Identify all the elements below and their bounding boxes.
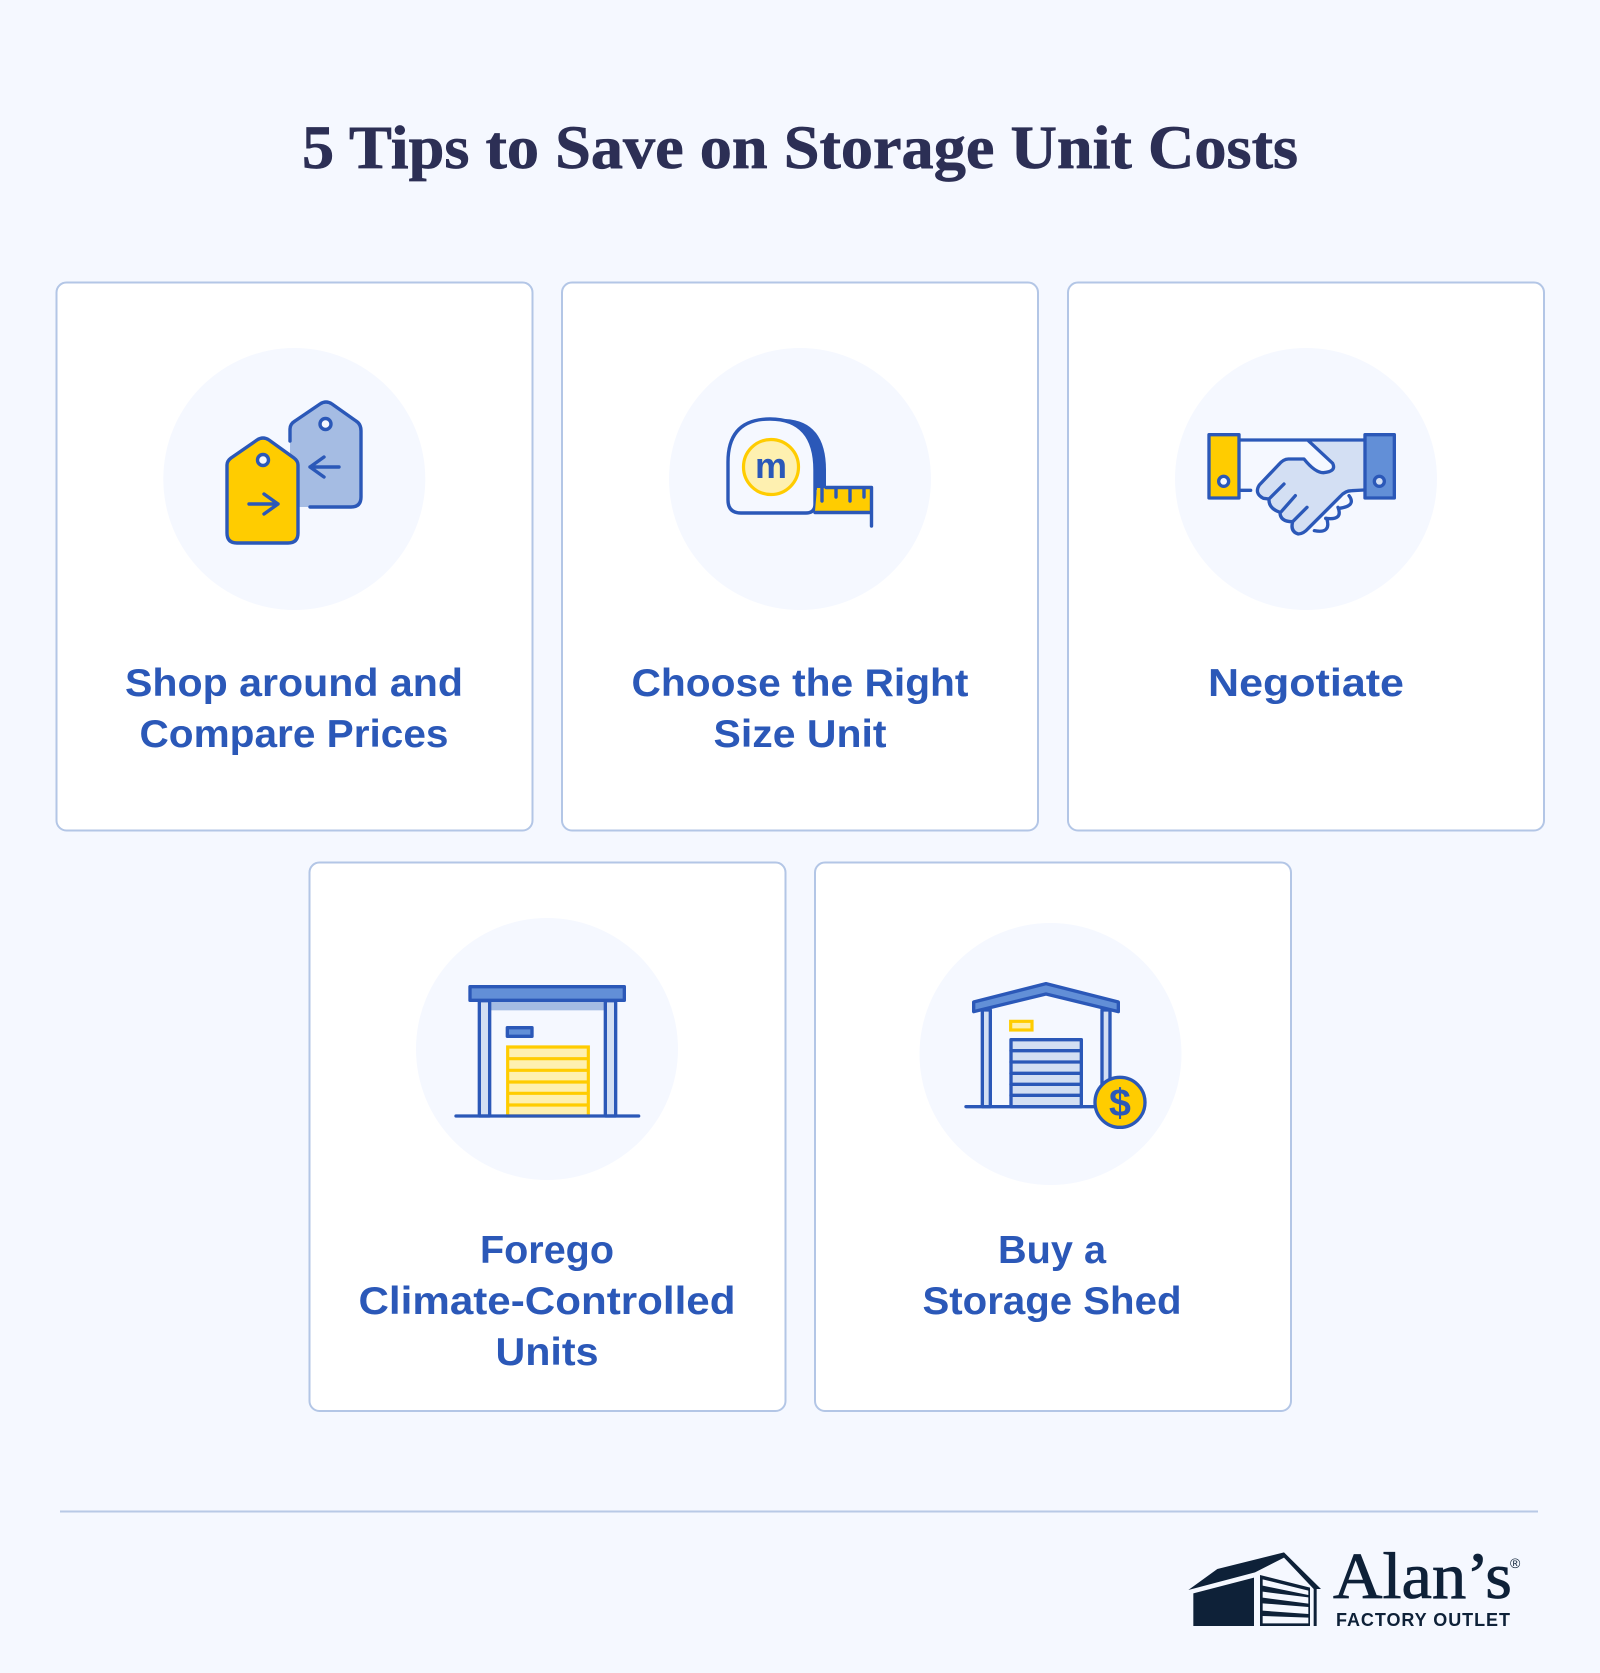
icon: storage shed with coin: $ xyxy=(1109,1081,1131,1125)
logo: Alan's Factory Outlet xyxy=(1188,1540,1521,1630)
heading: forego climate control: Units xyxy=(496,1331,598,1374)
icon: logo building xyxy=(1188,1552,1321,1626)
heading: right size xyxy=(632,662,969,756)
panel: right size xyxy=(562,282,1038,830)
icon: tape measure xyxy=(728,419,872,526)
heading: right size: Choose the Right xyxy=(632,662,969,705)
heading: shop around: Compare Prices xyxy=(140,713,448,756)
panel: shop around xyxy=(56,282,532,830)
icon: open storage unit xyxy=(456,987,639,1116)
registered mark: ® xyxy=(1510,1555,1521,1571)
wordmark: Alan’s xyxy=(1333,1540,1512,1613)
heading: buy a shed: Buy a xyxy=(998,1229,1106,1272)
panel: buy a shed xyxy=(815,862,1291,1411)
icon: handshake xyxy=(1209,435,1394,534)
panel: negotiate xyxy=(1068,282,1544,830)
heading: buy a shed xyxy=(922,1229,1182,1323)
panel: forego climate control xyxy=(310,862,786,1411)
heading: forego climate control: Forego xyxy=(480,1229,614,1272)
heading: forego climate control: Climate-Controlled xyxy=(358,1280,736,1323)
title: 5 Tips to Save on Storage Unit Costs xyxy=(302,115,1298,182)
icon: storage shed with coin xyxy=(966,984,1145,1127)
icon: price tags xyxy=(227,402,361,543)
heading: forego climate control xyxy=(358,1229,736,1374)
icon: tape measure: m xyxy=(755,445,787,486)
heading: shop around: Shop around and xyxy=(125,662,463,705)
heading: negotiate: Negotiate xyxy=(1208,662,1404,705)
heading: buy a shed: Storage Shed xyxy=(922,1280,1182,1323)
heading: shop around xyxy=(125,662,463,756)
heading: right size: Size Unit xyxy=(714,713,887,756)
tagline: FACTORY OUTLET xyxy=(1336,1610,1510,1630)
